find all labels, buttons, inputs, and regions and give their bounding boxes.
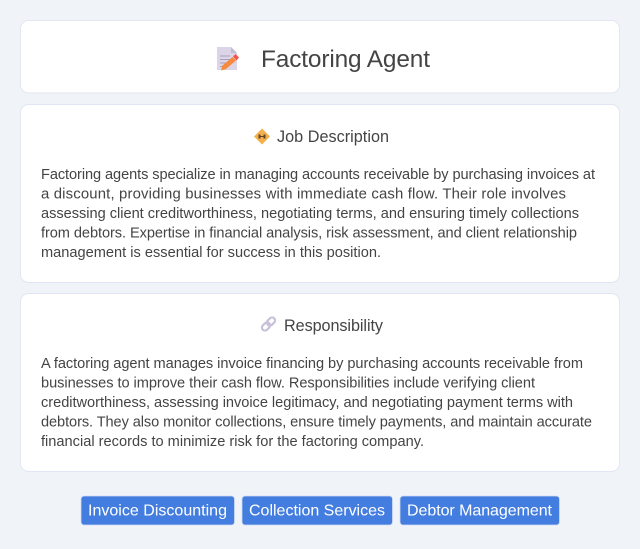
- responsibility text: creditworthiness, assessing invoice legitimacy, and negotiating payment terms with: [41, 395, 573, 411]
- panel: responsibility: [20, 294, 620, 472]
- job description text: management is essential for success in this position.: [41, 245, 381, 261]
- icon: document with pencil: [217, 47, 239, 70]
- icon: link: [261, 316, 276, 332]
- tag: debtor management: [400, 496, 560, 525]
- icon: diamond sign: [254, 128, 270, 144]
- responsibility text: businesses to improve their cash flow. Responsibilities include verifying client: [41, 376, 535, 392]
- job description text: [41, 167, 595, 261]
- tag: debtor management: Debtor Management: [407, 502, 553, 520]
- job description text: from debtors. Expertise in financial analysis, risk assessment, and client relationship: [41, 226, 577, 242]
- job description text: a discount, providing businesses with immediate cash flow. Their role involves: [41, 186, 566, 202]
- panel: job description: [20, 104, 620, 282]
- heading: responsibility: Responsibility: [284, 317, 384, 335]
- tag: collection services: [242, 496, 392, 525]
- job description text: assessing client creditworthiness, negotiating terms, and ensuring timely collections: [41, 206, 579, 222]
- responsibility text: debtors. They also monitor collections, ensure timely payments, and maintain accurate: [41, 414, 592, 430]
- responsibility text: [41, 356, 592, 450]
- title text: Factoring Agent: [261, 46, 430, 73]
- responsibility text: A factoring agent manages invoice financing by purchasing accounts receivable from: [41, 356, 583, 372]
- tag: collection services: Collection Services: [249, 502, 385, 520]
- responsibility text: financial records to minimize risk for the factoring company.: [41, 434, 424, 450]
- heading: job description: Job Description: [277, 128, 389, 146]
- job description text: Factoring agents specialize in managing accounts receivable by purchasing invoices at: [41, 167, 595, 183]
- tag: invoice discounting: Invoice Discounting: [88, 502, 227, 520]
- tag: invoice discounting: [81, 496, 234, 525]
- panel: title: [20, 20, 620, 93]
